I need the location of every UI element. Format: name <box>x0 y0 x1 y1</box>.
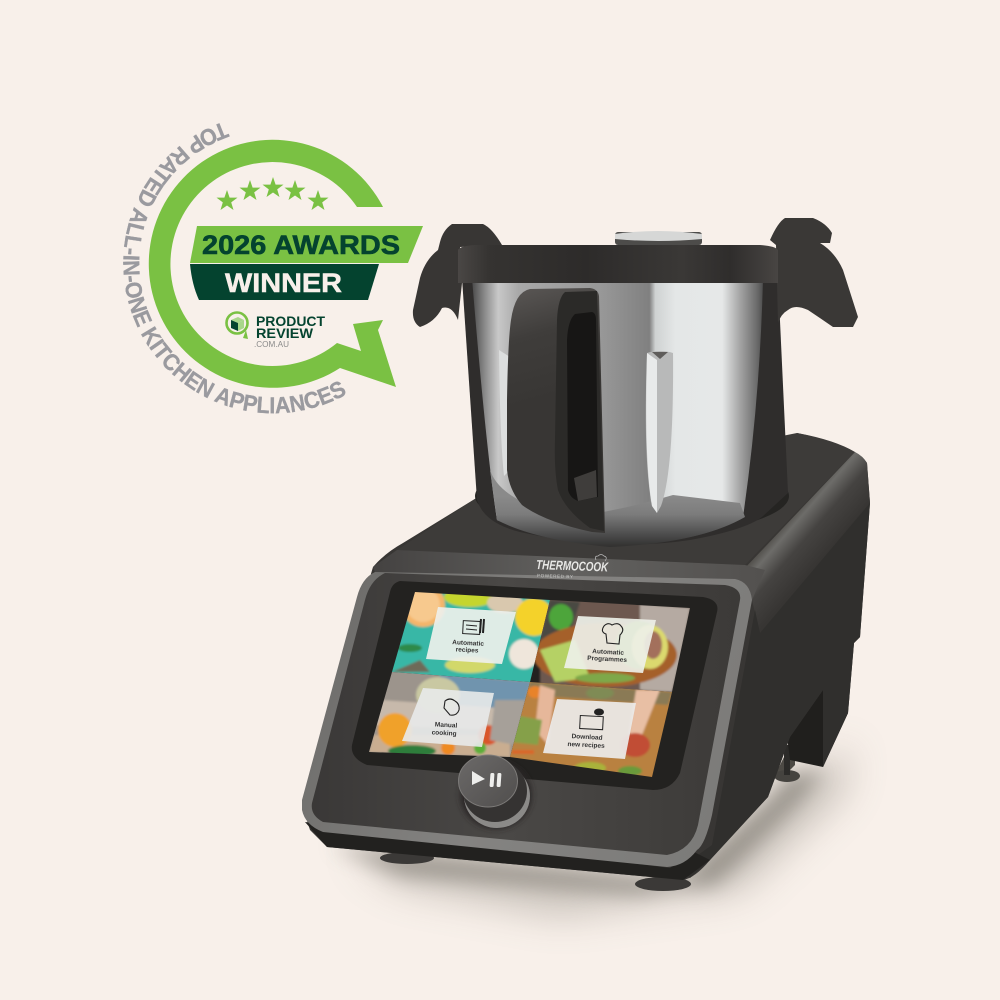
award badge <box>123 123 423 414</box>
ProductReview logo: PRODUCT <box>256 314 326 329</box>
bottom lip <box>305 822 710 880</box>
chamfer highlight <box>745 452 870 633</box>
touch screen <box>369 592 690 777</box>
brand logo <box>536 554 610 579</box>
menu card: download new recipes <box>543 699 636 759</box>
curved caption: TOP RATED ALL-IN-ONE KITCHEN APPLIANCES <box>123 123 346 414</box>
label: Download <box>571 733 603 742</box>
lid clamp right <box>770 218 858 327</box>
icon: touching hand <box>444 699 459 715</box>
menu card: manual cooking: cooking <box>431 729 457 738</box>
stainless body <box>472 278 763 546</box>
ProductReview logo: REVIEW <box>256 326 313 341</box>
inner panel <box>312 573 740 855</box>
side face <box>680 503 870 878</box>
front panel <box>302 550 765 867</box>
ground shadow <box>330 740 850 915</box>
bowl handle <box>507 288 605 533</box>
brand logo: THERMOCOOK <box>536 557 610 575</box>
icon: recipe book and cutlery <box>463 619 484 634</box>
left fin <box>499 350 510 476</box>
green banner <box>190 226 423 263</box>
dark banner: WINNER <box>225 268 342 298</box>
bowl recess <box>475 456 789 536</box>
green banner: 2026 AWARDS <box>202 230 400 260</box>
brand logo: POWERED BY <box>537 573 574 579</box>
grey bezel <box>302 572 752 867</box>
base body <box>302 433 870 880</box>
appliance <box>302 218 870 891</box>
green speech-bubble ring <box>149 140 396 388</box>
right fin <box>646 351 673 513</box>
ProductReview logo <box>226 312 326 349</box>
quadrant: citrus on teal <box>392 592 550 682</box>
control knob <box>458 755 532 829</box>
lower reflection <box>490 470 745 547</box>
glass surround <box>352 581 717 790</box>
menu card: manual cooking <box>402 688 494 747</box>
base rear cutout <box>785 688 848 767</box>
label: Automatic <box>592 648 625 657</box>
label: Manual <box>435 721 458 730</box>
menu card: automatic recipes <box>426 607 516 664</box>
dark banner <box>190 264 379 300</box>
icon: play pause <box>472 771 501 787</box>
lid cup <box>615 231 702 245</box>
quadrant: hands and vegetables <box>510 682 672 777</box>
menu card: automatic programmes <box>564 616 656 673</box>
five stars <box>216 177 328 210</box>
label: Automatic <box>452 639 485 648</box>
bowl dark shell <box>462 278 788 544</box>
upper strip <box>373 550 765 600</box>
menu card: download new recipes: new recipes <box>567 741 605 750</box>
base top surface <box>397 433 855 565</box>
feet <box>380 735 800 891</box>
mixing bowl <box>413 218 858 547</box>
icon: chef hat <box>602 624 623 644</box>
icon: book and cloud <box>580 708 604 730</box>
quadrant: avocado bowl <box>534 600 690 692</box>
menu card: automatic programmes: Programmes <box>587 655 627 664</box>
lid clamp left <box>413 224 502 327</box>
menu card: automatic recipes: recipes <box>456 646 479 655</box>
quadrant: kitchen and fruit <box>369 672 530 757</box>
ProductReview logo: .COM.AU <box>254 339 289 349</box>
lid band <box>458 245 778 283</box>
